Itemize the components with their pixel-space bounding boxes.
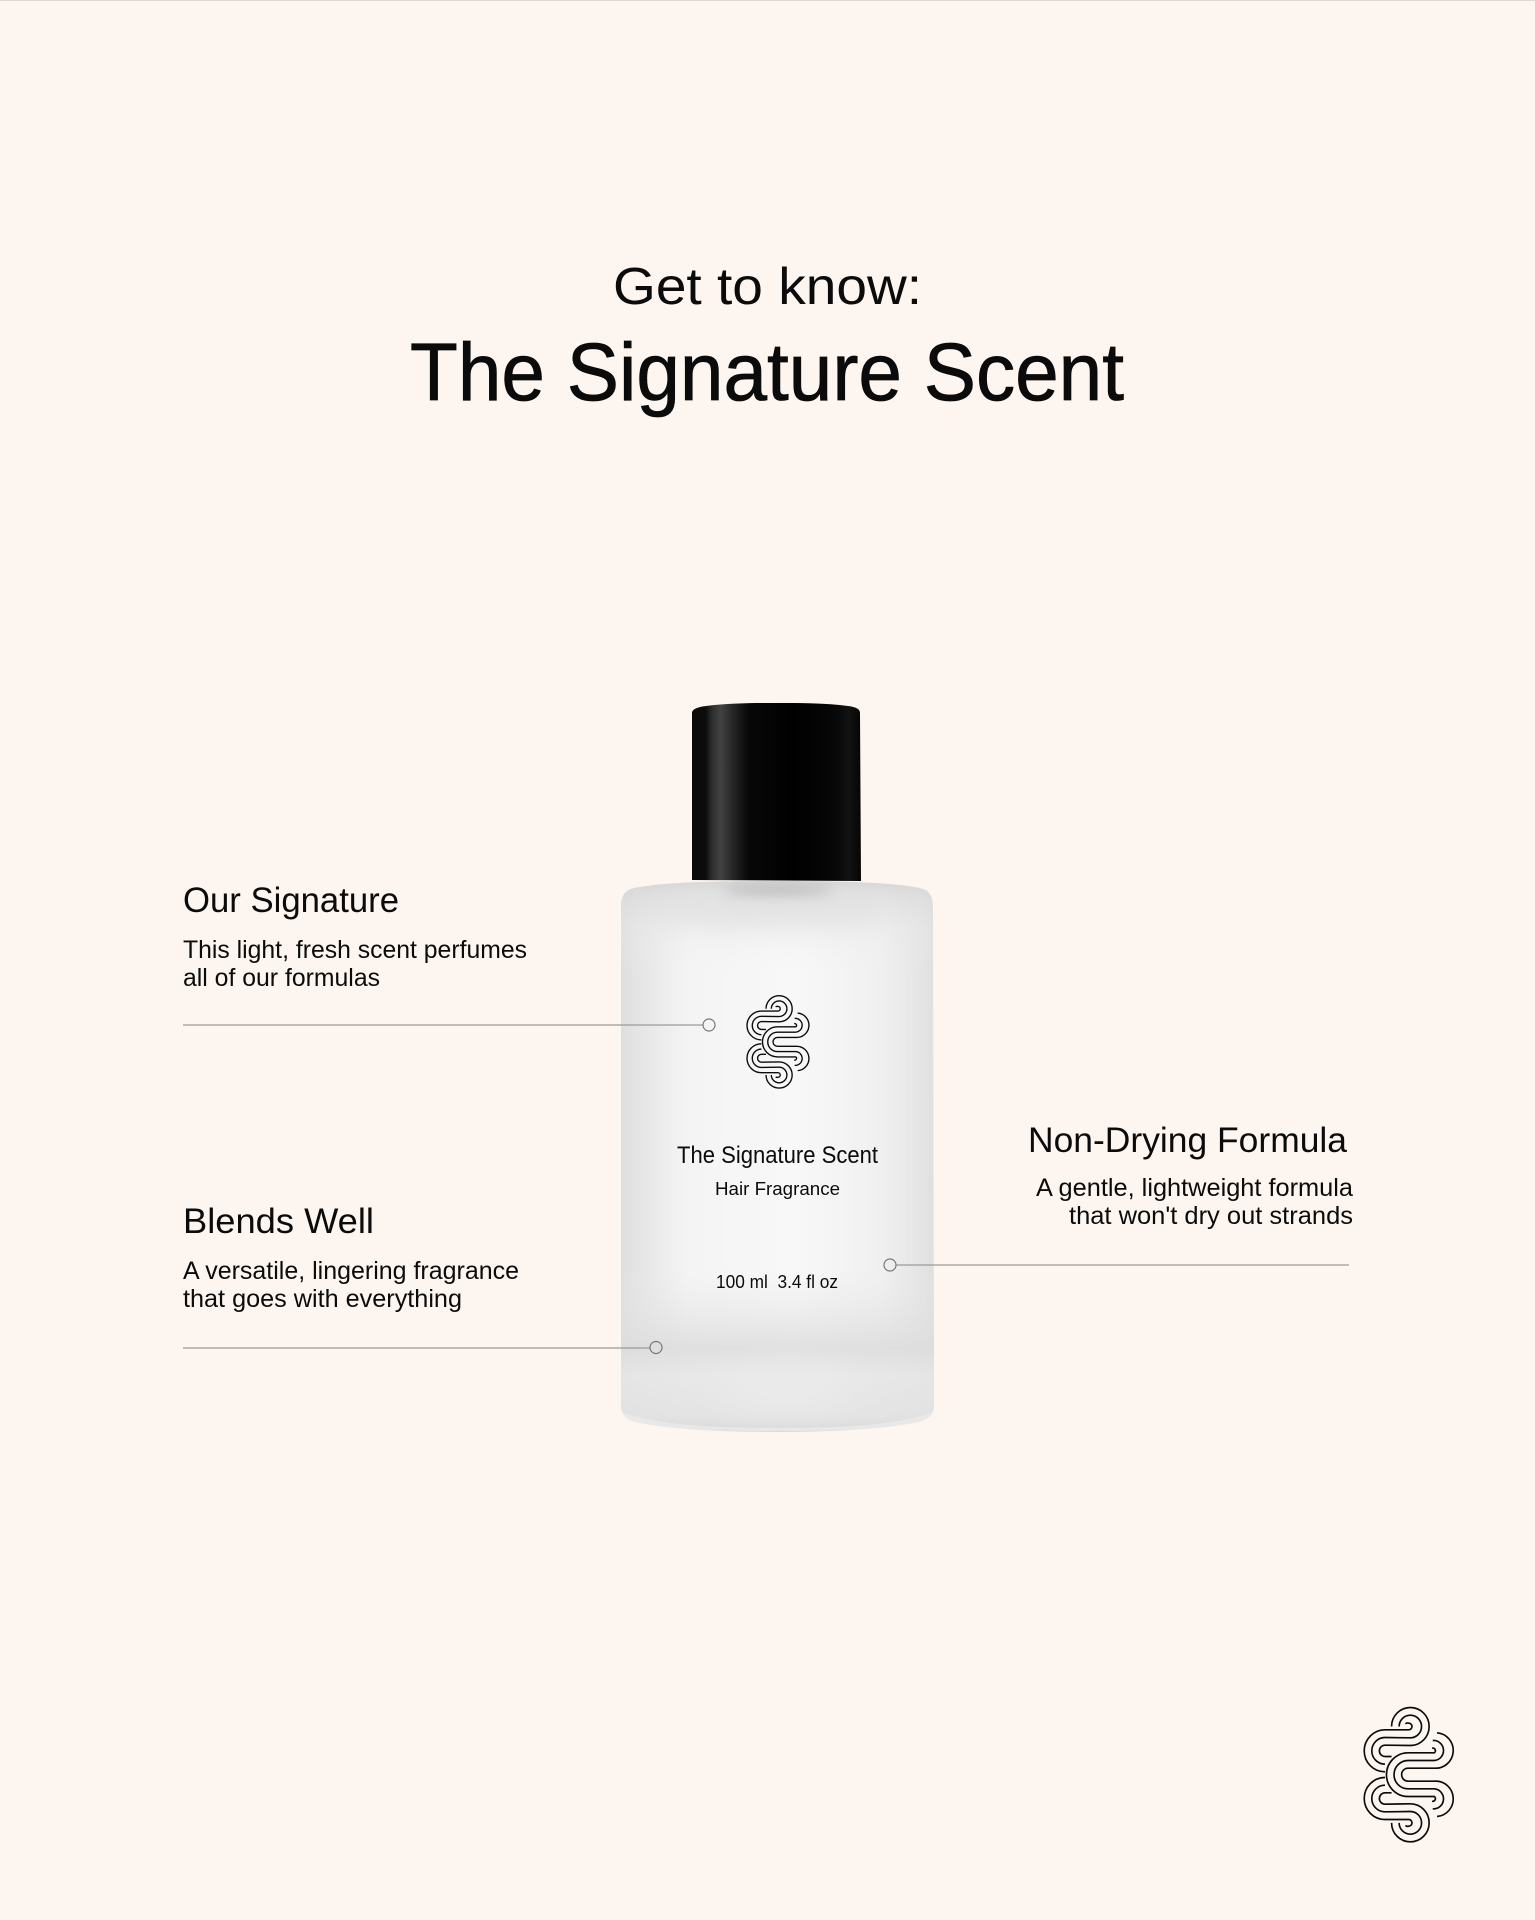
- title: get to know: Get to know:: [613, 258, 922, 316]
- title: the signature scent: The Signature Scent: [410, 327, 1124, 418]
- callout: non-drying formula: [884, 1121, 1353, 1271]
- callout: our signature: [183, 881, 715, 1031]
- brand logo: [1363, 1706, 1454, 1843]
- callout: blends well: A versatile, lingering fragrance: [183, 1257, 519, 1285]
- product bottle: [615, 703, 940, 1438]
- bottle label text: The Signature Scent: [677, 1142, 878, 1169]
- callout: non-drying formula: that won't dry out strands: [1069, 1202, 1353, 1230]
- callout: non-drying formula: Non-Drying Formula: [1028, 1121, 1348, 1160]
- bottle body: [615, 878, 940, 1438]
- heading: [410, 258, 1124, 418]
- bottle label text: [677, 1142, 878, 1292]
- callout: our signature: all of our formulas: [183, 964, 380, 992]
- callout: non-drying formula: A gentle, lightweight formula: [1036, 1174, 1353, 1202]
- callout: blends well: Blends Well: [183, 1202, 374, 1241]
- bottle label text: Hair Fragrance: [715, 1179, 840, 1199]
- callout: our signature: This light, fresh scent perfumes: [183, 936, 527, 964]
- callout: blends well: that goes with everything: [183, 1285, 462, 1313]
- bottle logo: [746, 995, 810, 1089]
- bottle label text: 100 ml 3.4 fl oz: [716, 1272, 838, 1292]
- callout: blends well: [183, 1202, 662, 1354]
- callout: our signature: Our Signature: [183, 881, 399, 920]
- bottle cap: [692, 703, 861, 881]
